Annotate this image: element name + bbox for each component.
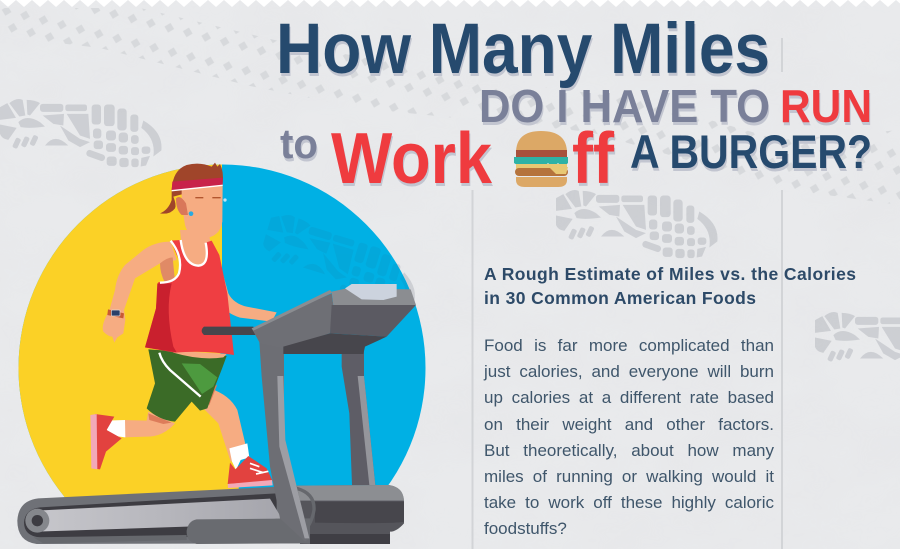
body paragraph: foodstuffs?: [484, 519, 567, 538]
runner: head: [160, 163, 227, 265]
title line 1: How Many Miles: [276, 10, 770, 89]
front cover: [187, 518, 310, 544]
title: [276, 10, 872, 199]
title line 3: to: to: [280, 120, 318, 167]
body paragraph: [484, 336, 774, 538]
runner: shorts: [147, 349, 227, 422]
subheading line 1: A Rough Estimate of Miles vs. the Calories: [484, 264, 856, 284]
hair: [160, 163, 223, 214]
runner: near arm: [103, 242, 177, 343]
neck: [180, 230, 212, 265]
body paragraph: just calories, and everyone will burn: [484, 362, 774, 381]
title line 2: do I have to: DO I HAVE TO: [479, 80, 770, 132]
rear post: [342, 345, 375, 485]
deck frame: [17, 486, 310, 544]
shoe print: centre: [556, 190, 718, 258]
zigzag top edge: [0, 0, 900, 8]
eyes: [195, 196, 221, 200]
motor housing: [297, 485, 404, 544]
handlebar: [202, 327, 257, 335]
diamond dot band: [0, 8, 900, 205]
title line 3: a burger: A BURGER?: [630, 125, 872, 178]
body paragraph: Food is far more complicated than: [484, 336, 774, 355]
face: [182, 183, 223, 238]
console: [252, 284, 416, 354]
icon: burger: [514, 131, 568, 187]
runner: far arm: [208, 253, 277, 322]
body paragraph: up calories at a different rate based: [484, 388, 774, 407]
screen: [345, 284, 397, 300]
body paragraph: But theoretically, about how many: [484, 441, 774, 460]
title line 3: work: Work: [331, 119, 493, 199]
treadmill: [17, 284, 416, 544]
headband: [172, 178, 223, 191]
running belt: [37, 499, 282, 532]
shoe print: top left: [0, 99, 162, 167]
shoe print: right edge: [815, 312, 900, 380]
title line 3: ff: ff: [572, 119, 615, 199]
body paragraph: miles of running or walking would it: [484, 467, 774, 486]
ear shadow: [176, 197, 188, 215]
runner: front leg and shoe: [200, 384, 273, 488]
title line 2: run: RUN: [780, 80, 872, 132]
runner: rear leg and shoe: [90, 412, 175, 469]
body paragraph: on their weight and other factors.: [484, 415, 774, 434]
runner: tank top: [145, 240, 234, 355]
circle backdrop: yellow and blue: [18, 164, 426, 498]
vertical guide lines: [472, 38, 782, 549]
watch: [107, 309, 124, 318]
rear roller: [25, 509, 49, 533]
sweat drops: [189, 211, 193, 216]
front post: [259, 342, 310, 542]
subheading: [484, 264, 856, 308]
body paragraph: take to work off these highly caloric: [484, 493, 774, 512]
shoe print: on circle: [264, 215, 415, 300]
subheading line 2: in 30 Common American Foods: [484, 288, 756, 308]
